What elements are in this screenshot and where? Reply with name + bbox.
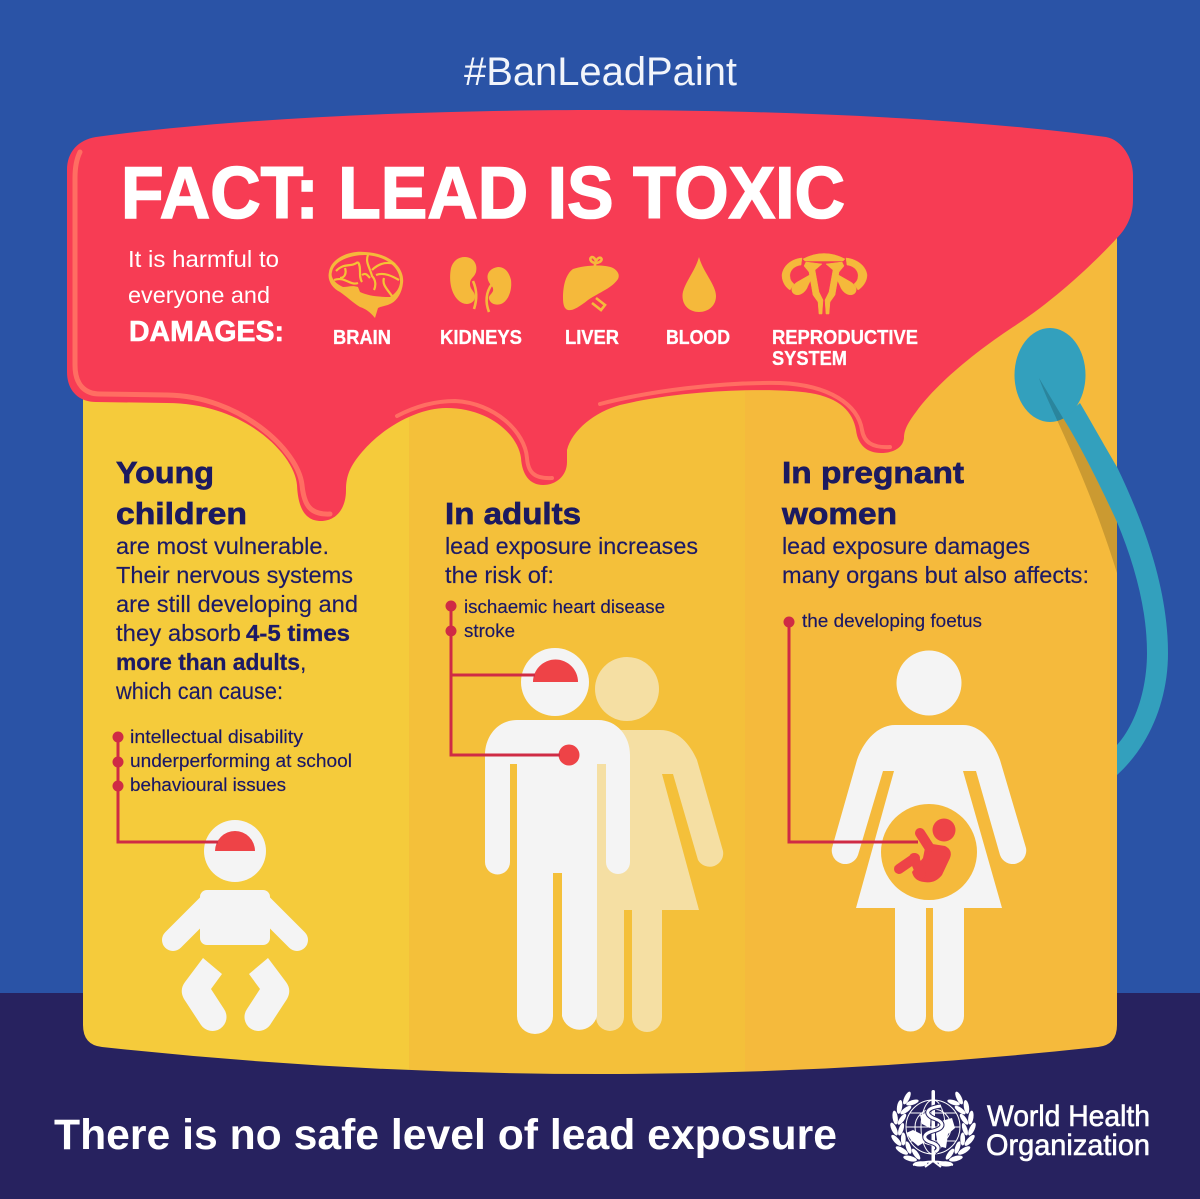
list: adult effects: ischaemic heart disease <box>464 597 665 617</box>
body text: young children: are still developing and <box>116 591 358 617</box>
body text: adults: the risk of: <box>445 562 554 588</box>
intro text: DAMAGES: <box>129 316 284 348</box>
figure: woman silhouette behind <box>590 657 723 1032</box>
body text: pregnant women: many organs but also affects: <box>782 562 1089 588</box>
label: reproductive system: REPRODUCTIVE <box>772 326 918 349</box>
heading: young children <box>116 455 247 531</box>
icon: WHO emblem <box>889 1090 977 1167</box>
label: blood: BLOOD <box>666 326 730 349</box>
icon: kidneys <box>450 257 511 312</box>
logo text: World Health Organization <box>986 1100 1150 1162</box>
logo text: World Health Organization: World Health <box>987 1100 1150 1133</box>
heading: pregnant women: In pregnant <box>782 455 964 490</box>
icon: brain <box>329 252 403 318</box>
bucket handle <box>1014 328 1168 775</box>
intro text <box>128 246 284 348</box>
title: FACT: LEAD IS TOXIC <box>121 153 845 234</box>
list: adult effects <box>464 597 665 641</box>
heading: young children: Young <box>116 455 214 490</box>
body text: young children: , <box>300 649 306 675</box>
column: young children <box>112 455 358 1031</box>
callout line: pregnancy <box>784 616 918 842</box>
body text: pregnant women: lead exposure damages <box>782 533 1030 559</box>
body text: adults <box>445 533 698 588</box>
label: reproductive system <box>772 326 918 370</box>
paint bucket body <box>83 200 1117 1100</box>
intro text: It is harmful to <box>128 246 279 272</box>
body text: young children <box>115 533 358 704</box>
column: pregnant women <box>781 455 1089 1032</box>
body text: young children: Their nervous systems <box>116 562 353 588</box>
label: brain: BRAIN <box>333 326 391 349</box>
body text: young children: 4-5 times <box>246 620 350 646</box>
icon: liver <box>563 257 619 310</box>
body text: young children: which can cause: <box>115 678 283 704</box>
figure: baby <box>173 820 297 1031</box>
body text: pregnant women <box>782 533 1089 588</box>
body text: adults: lead exposure increases <box>445 533 698 559</box>
column: adults <box>445 496 723 1034</box>
heading: adults: In adults <box>445 496 581 531</box>
body text: young children: more than adults <box>116 649 300 675</box>
figure: man <box>485 648 630 1034</box>
list: pregnancy effects: the developing foetus <box>802 611 982 631</box>
callout line: child <box>112 732 218 842</box>
footer message: There is no safe level of lead exposure <box>54 1111 837 1159</box>
body text: young children: are most vulnerable. <box>116 533 329 559</box>
callout line: adults <box>446 600 560 755</box>
hashtag: #BanLeadPaint <box>464 50 737 94</box>
list: child effects <box>130 727 352 795</box>
label: liver: LIVER <box>565 326 619 349</box>
list: child effects: behavioural issues <box>130 775 286 795</box>
list: adult effects: stroke <box>464 621 515 641</box>
heading: pregnant women: women <box>781 496 897 531</box>
list: child effects: intellectual disability <box>130 727 303 747</box>
paint dripping over bucket <box>67 110 1133 521</box>
icon: blood drop <box>682 257 716 312</box>
list: child effects: underperforming at school <box>130 751 352 771</box>
logo text: World Health Organization: Organization <box>986 1129 1150 1162</box>
body text: young children: they absorb <box>116 620 241 646</box>
figure: pregnant woman <box>832 650 1026 1032</box>
intro text: everyone and <box>128 282 270 308</box>
label: kidneys: KIDNEYS <box>440 326 522 349</box>
icon: reproductive system <box>782 254 867 314</box>
heading: young children: children <box>116 496 247 531</box>
heading: pregnant women <box>781 455 964 531</box>
label: reproductive system: SYSTEM <box>772 347 847 370</box>
